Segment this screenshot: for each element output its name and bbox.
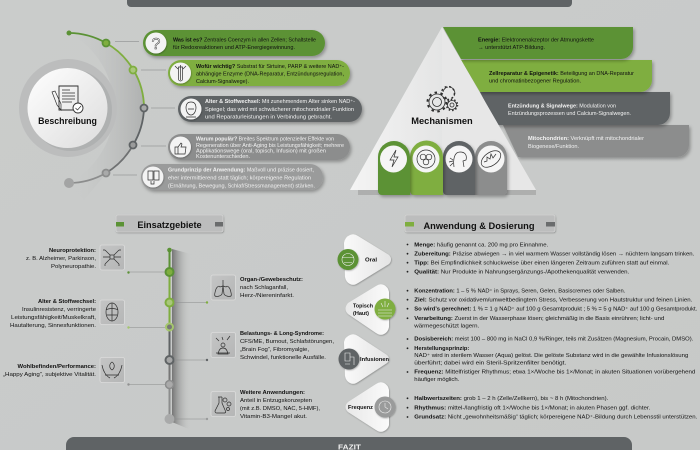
icon: lightning — [390, 150, 398, 167]
item: Wofür wichtig: Calcium-Signalwege). — [196, 79, 249, 85]
item: Warum populär: Regeneration über Anti-Aging bis Leistungsfähigkeit; mehrere — [196, 143, 344, 149]
item: Alter und Stoffwechsel: Insulinresistenz, verringerte — [22, 307, 96, 313]
icon: clock — [379, 401, 391, 413]
heading: Mechanismen: Mechanismen — [411, 116, 473, 126]
list: Infusionen: NAD⁺ wird in sterilem Wasser (Aqua) gelöst. Die gelöste Substanz wird in die gewählte Infusionslösung — [414, 353, 688, 359]
item: Alter und Stoffwechsel: Leistungsfähigkeit/Muskelkraft, — [11, 315, 96, 321]
item: Warum populär: Kostenunterschieden. — [196, 154, 250, 160]
arc shadow — [69, 33, 144, 200]
icon: mitochondrion — [478, 147, 504, 171]
item: Alter und Stoffwechsel — [10, 299, 124, 329]
list: Topisch — [407, 288, 697, 329]
item: Wohlbefinden: „Happy Aging“, subjektive Vitalität. — [3, 372, 96, 378]
list: Topisch: Ziel: Schutz vor oxidativem/umweltbedingtem Stress, Verbesserung von Hautstruktur und feinen Linien. — [414, 297, 692, 303]
list: Infusionen — [407, 337, 695, 383]
item: Alter und Stoffwechsel: Alter & Stoffwechsel: — [38, 299, 96, 305]
panel: Anwendung und Dosierung — [338, 215, 697, 432]
icon: gears — [428, 86, 458, 112]
item: Organschutz: Organ-/Gewebeschutz: — [240, 277, 303, 283]
item: Grundprinzip: eher intermittierend statt täglich; körpereigene Regulation — [168, 176, 311, 182]
list: Oral: Zubereitung: Präzise abwiegen → in viel warmem Wasser vollständig lösen → nüchtern langsam trinken. — [414, 251, 694, 257]
item: Weitere Anwendungen — [211, 390, 320, 420]
item: Neuroprotektion — [26, 245, 124, 270]
heading: Anwendung und Dosierung: Anwendung & Dosierung — [423, 221, 535, 231]
item: Weitere Anwendungen: Vitamin-B3-Mangel akut. — [240, 414, 307, 420]
heading: Anwendung und Dosierung — [405, 215, 555, 232]
item: Warum populär: Warum populär? Breites Spektrum potenzieller Effekte von — [196, 136, 334, 142]
band 3: Entzündung: Entzündungsprozessen und Calcium-Signalwegen. — [508, 111, 631, 117]
heading: Einsatzgebiete: Einsatzgebiete — [137, 220, 202, 230]
list: Frequenz: Grundsatz: Nicht „gewohnheitsmäßig“ täglich; körpereigene NAD⁺-Bildung durch Lebensstil unterstützen. — [414, 415, 697, 421]
icon: skin layers — [378, 301, 392, 316]
list: Infusionen: Dosisbereich: meist 100 – 800 mg in NaCl 0,9 %/Ringer, teils mit Zusätzen (Magnesium, Procain, DMSO). — [414, 337, 693, 343]
icon: neuron — [103, 250, 121, 266]
item: Weitere Anwendungen: Weitere Anwendungen: — [240, 390, 305, 396]
list: Frequenz: Rhythmus: mittel-/langfristig oft 1×/Woche bis 1×/Monat; in akuten Phasen ggf. dichter. — [414, 405, 650, 411]
item: Grundprinzip: (Ernährung, Bewegung, Schlaf/Stressmanagement) stärken. — [168, 184, 315, 190]
route: Topisch (points left): Topisch — [353, 304, 373, 310]
list: Frequenz — [407, 396, 697, 421]
item: Grundprinzip: Grundprinzip der Anwendung: Maßvoll und präzise dosiert, — [168, 168, 314, 174]
item: Wofür wichtig: abhängige Enzyme (DNA-Reparatur, Entzündungsregulation, — [196, 72, 344, 78]
icon: test tube — [175, 65, 186, 81]
item: Alter und Stoffwechsel: Alter & Stoffwechsel: Mit zunehmendem Alter sinken NAD⁺- — [205, 99, 355, 105]
item: Weitere Anwendungen: Anteil in Entzugskonzepten — [240, 398, 312, 404]
panel: Mechanismen pyramid — [350, 27, 689, 195]
item: Organschutz: Herz-/Niereninfarkt. — [240, 293, 294, 299]
list: Infusionen: Herstellungsprinzip: — [414, 346, 470, 352]
item: Was ist es — [143, 30, 325, 56]
item: Belastungssyndrome — [211, 331, 334, 361]
band 4: Mitochondrien — [503, 125, 689, 157]
item: Wohlbefinden: Wohlbefinden/Performance: — [18, 364, 96, 370]
icon: infusion bag — [345, 353, 354, 365]
icon: flask — [215, 397, 231, 413]
central disc: Beschreibung: Beschreibung — [38, 116, 97, 126]
list: Infusionen: häufiger möglich. — [414, 377, 459, 383]
panel: Fazit — [66, 437, 632, 450]
item: Was ist es: Was ist es? Zentrales Coenzym in allen Zellen; Schaltstelle — [173, 38, 316, 44]
item: Neuroprotektion: Polyneuropathie. — [51, 264, 96, 270]
item: Was ist es: für Redoxreaktionen und ATP-Energiegewinnung. — [173, 45, 295, 51]
item: Alter und Stoffwechsel: Hautalterung, Sinnesfunktionen. — [10, 323, 96, 329]
top banner — [127, 0, 572, 7]
item: Neuroprotektion: Neuroprotektion: — [49, 248, 96, 254]
band 3: Entzündung — [480, 92, 670, 125]
tab grey — [475, 141, 507, 195]
connectors — [113, 42, 175, 175]
icon: face — [106, 303, 118, 321]
list: Topisch: Konzentration: 1 – 5 % NAD⁺ in Sprays, Seren, Gelen, Basiscremes oder Salben. — [414, 288, 625, 294]
tab green — [378, 141, 410, 195]
route: Topisch (points left): (Haut) — [353, 311, 369, 317]
band 2: Zellreparatur — [461, 60, 652, 92]
list: Oral: Qualität: Nur Produkte in Nahrungsergänzungs-/Apothekenqualität verwenden. — [414, 269, 629, 275]
icon: capsule dish — [342, 254, 354, 266]
item: Alter und Stoffwechsel — [178, 96, 362, 122]
item: Organschutz — [211, 275, 303, 300]
item: Belastungssyndrome: Schwindel, funktionelle Ausfälle. — [240, 355, 326, 361]
pyramid body — [350, 27, 536, 190]
timeline — [164, 248, 191, 430]
item: Wofür wichtig — [168, 60, 350, 86]
item: Weitere Anwendungen: (mit z.B. DMSO, NAC, 5-HMF), — [240, 406, 320, 412]
route: Infusionen — [338, 334, 389, 384]
route: Frequenz (points left): Frequenz — [348, 405, 373, 411]
band 2: Zellreparatur: und chromatinbezogener Regulation. — [489, 78, 581, 84]
route: Topisch (points left) — [346, 284, 396, 335]
tabs — [378, 140, 507, 195]
route: Oral — [338, 234, 391, 285]
icon: hands — [102, 362, 122, 378]
icon: document with pen — [52, 86, 83, 113]
icon: thumbs up — [175, 143, 186, 154]
panel: Beschreibung — [19, 30, 362, 200]
item: Belastungssyndrome: CFS/ME, Burnout, Schlafstörungen, — [240, 339, 334, 345]
route: Oral: Oral — [365, 258, 378, 264]
item: Belastungssyndrome: Belastungs- & Long-Syndrome: — [240, 331, 324, 337]
band 4: Mitochondrien: Biogenese/Funktion. — [528, 144, 579, 150]
list: Topisch: So wird’s gerechnet: 1 % = 1 g NAD⁺ auf 100 g Gesamtprodukt ; 5 % = 5 g NAD⁺ auf 100 g Gesamtprodukt. — [414, 306, 697, 312]
icon: aging face — [186, 102, 196, 117]
curved timeline — [64, 30, 148, 188]
item: Warum populär — [168, 134, 350, 160]
list: Topisch: wärmegeschützt lagern. — [414, 323, 479, 329]
band 1: Energie: → unterstützt ATP-Bildung. — [478, 45, 545, 51]
list: Topisch: Verarbeitung: Zuerst in der Wasserphase lösen; gleichmäßig in die Basis einrühren; licht- und — [414, 316, 664, 322]
icon: lungs — [215, 280, 231, 296]
icon: meditating figure — [216, 336, 230, 354]
icon: cells — [417, 150, 435, 168]
route: Infusionen: Infusionen — [360, 357, 389, 363]
band 4: Mitochondrien: Mitochondrien: Verknüpft mit mitochondrialer — [528, 136, 644, 142]
list: Oral: Tipp: Bei Empfindlichkeit schluckweise über einen längeren Zeitraum zuführen statt auf einmal. — [414, 260, 669, 266]
item: Alter und Stoffwechsel: Spiegel; das wird mit schwächerer mitochondrialer Funktion — [205, 107, 354, 113]
item: Wohlbefinden — [3, 358, 124, 382]
band 1: Energie: Energie: Elektronenakzeptor der Atmungskette — [478, 38, 594, 44]
list: Infusionen: Frequenz: Mittelfristiger Rhythmus; etwa 1×/Woche bis 1×/Monat; in akuten Situationen vorübergehend — [414, 369, 695, 375]
connectors — [128, 272, 207, 419]
item: Warum populär: Applikationswege (oral, topisch, Infusion) mit großen — [196, 148, 326, 154]
item: Wofür wichtig: Wofür wichtig? Substrat für Sirtuine, PARP & weitere NAD⁺- — [196, 64, 344, 70]
central disc: Beschreibung — [19, 59, 117, 157]
list: Infusionen: überführt; dabei wird ein Steril-Spritzenfilter benötigt. — [414, 361, 566, 367]
list: Frequenz: Halbwertszeiten: grob 1 – 2 h (Zelle/Zellkern), bis ~ 8 h (Mitochondrien). — [414, 396, 608, 402]
icon: question mark: ? — [152, 36, 161, 53]
item: Alter und Stoffwechsel: und Reparaturleistungen in Verbindung gebracht. — [205, 114, 332, 120]
band 1: Energie — [443, 27, 633, 59]
item: Belastungssyndrome: „Brain Fog“, Fibromyalgie, — [240, 347, 309, 353]
route: Frequenz (points left) — [346, 382, 396, 432]
item: Grundprinzip — [141, 164, 323, 190]
item: Neuroprotektion: z. B. Alzheimer, Parkinson, — [26, 256, 96, 262]
list: Oral — [407, 242, 694, 275]
icon: coughing head — [449, 152, 466, 167]
icon: books — [148, 171, 159, 184]
band 3: Entzündung: Entzündung & Signalwege: Modulation von — [508, 104, 616, 110]
heading: Einsatzgebiete — [116, 215, 223, 232]
panel: Einsatzgebiete — [3, 215, 334, 430]
tab dark — [443, 141, 475, 195]
band 2: Zellreparatur: Zellreparatur & Epigenetik: Beteiligung an DNA-Reparatur — [489, 71, 634, 77]
tab light green — [410, 140, 443, 195]
list: Oral: Menge: häufig genannt ca. 200 mg pro Einnahme. — [414, 242, 548, 248]
item: Organschutz: nach Schlaganfall, — [240, 285, 288, 291]
